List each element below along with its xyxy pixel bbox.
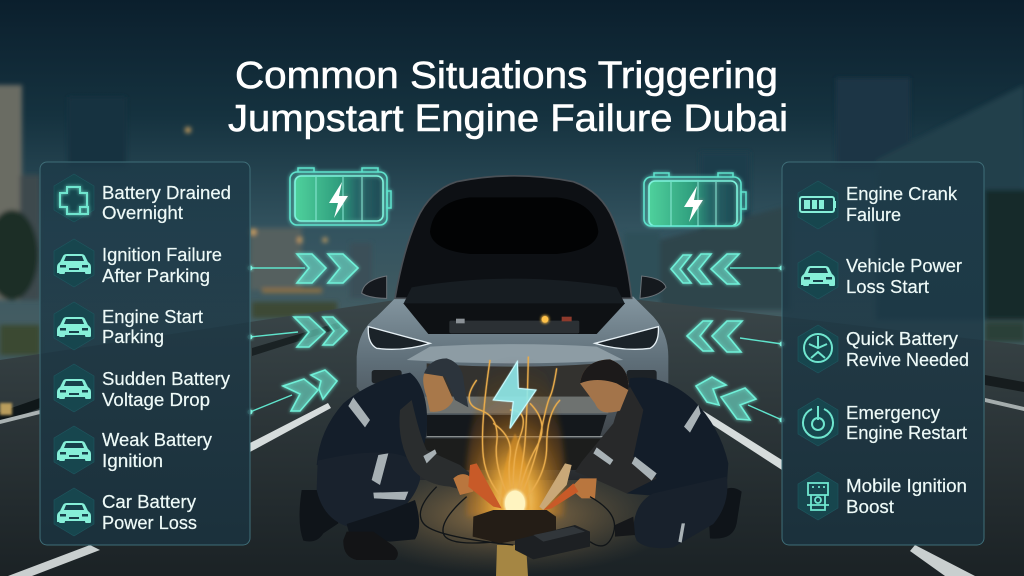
item: Vehicle Power Loss Start: Vehicle Power bbox=[846, 256, 962, 276]
item: Quick Battery Revive Needed: Quick Battery bbox=[846, 329, 958, 349]
item: Ignition Failure After Parking: Ignition Failure bbox=[102, 245, 222, 265]
jumper clamp bbox=[468, 463, 502, 508]
item: Engine Crank Failure: Engine Crank bbox=[846, 184, 958, 204]
arm bbox=[575, 387, 657, 493]
item: Car Battery Power Loss: Car Battery bbox=[102, 492, 196, 512]
item: Battery Drained Overnight: Overnight bbox=[102, 203, 183, 223]
battery icon: left bbox=[290, 168, 391, 225]
torso bbox=[617, 378, 728, 496]
item: Weak Battery Ignition: Weak Battery bbox=[102, 430, 212, 450]
item: Car Battery Power Loss: Power Loss bbox=[102, 513, 197, 533]
hands bbox=[453, 474, 473, 495]
item: Quick Battery Revive Needed: Revive Needed bbox=[846, 350, 969, 370]
item: Battery Drained Overnight bbox=[54, 174, 231, 223]
reflective stripes bbox=[348, 397, 437, 500]
arrow row 3 bbox=[696, 377, 784, 422]
item: Sudden Battery Voltage Drop: Voltage Drop bbox=[102, 390, 210, 410]
open hood bbox=[395, 176, 632, 298]
thigh and knee bbox=[633, 477, 727, 548]
arm bbox=[399, 400, 470, 491]
head and cap bbox=[423, 367, 453, 412]
item: Mobile Ignition Boost bbox=[798, 472, 967, 520]
item: Vehicle Power Loss Start: Loss Start bbox=[846, 277, 929, 297]
car body bbox=[357, 297, 668, 480]
item: Emergency Engine Restart: Engine Restart bbox=[846, 423, 967, 443]
title line 2: Jumpstart Engine Failure Dubai bbox=[228, 98, 788, 140]
grille bbox=[372, 344, 657, 470]
item: Emergency Engine Restart bbox=[798, 398, 967, 446]
arrow row 1 bbox=[248, 254, 358, 283]
engine bay battery bbox=[449, 316, 579, 333]
item: Ignition Failure After Parking bbox=[54, 239, 222, 287]
left mirror bbox=[362, 276, 387, 298]
panel: left situations list bbox=[40, 162, 250, 545]
hood inner window bbox=[430, 197, 598, 254]
right mirror bbox=[640, 276, 666, 298]
reflective stripes bbox=[593, 405, 701, 543]
torso bbox=[317, 373, 427, 472]
item: Engine Crank Failure: Failure bbox=[846, 205, 901, 225]
front boot bbox=[343, 532, 398, 560]
lightning bolt bbox=[493, 362, 536, 428]
jumper clamp bbox=[539, 463, 572, 510]
mechanic: right bbox=[539, 359, 742, 548]
arrow row 2 bbox=[248, 317, 347, 347]
arrow row 2 bbox=[687, 321, 784, 352]
back boot bbox=[300, 490, 338, 541]
item: Sudden Battery Voltage Drop: Sudden Battery bbox=[102, 369, 230, 389]
front foot bbox=[615, 517, 635, 537]
item: Emergency Engine Restart: Emergency bbox=[846, 403, 940, 423]
left headlight bbox=[368, 327, 430, 349]
item: Car Battery Power Loss bbox=[54, 488, 197, 536]
item: Engine Start Parking: Engine Start bbox=[102, 307, 203, 327]
thigh bbox=[317, 453, 420, 527]
head bbox=[580, 359, 628, 413]
flame and lightning spark bbox=[466, 350, 565, 517]
item: Engine Start Parking: Parking bbox=[102, 327, 164, 347]
item: Quick Battery Revive Needed bbox=[798, 325, 969, 373]
arrow row 3 bbox=[248, 370, 337, 414]
item: Weak Battery Ignition bbox=[54, 426, 212, 474]
item: Battery Drained Overnight: Battery Drained bbox=[102, 183, 231, 203]
arrows: right side bbox=[671, 254, 784, 422]
right headlight bbox=[595, 327, 658, 349]
item: Mobile Ignition Boost: Boost bbox=[846, 497, 894, 517]
title bbox=[228, 55, 788, 140]
engine bay bbox=[403, 303, 625, 334]
car with open hood bbox=[357, 176, 668, 480]
battery icon: right bbox=[644, 173, 746, 226]
shin bbox=[347, 500, 419, 542]
item: Mobile Ignition Boost: Mobile Ignition bbox=[846, 476, 967, 496]
item: Vehicle Power Loss Start bbox=[798, 251, 962, 299]
item: Engine Start Parking bbox=[54, 302, 203, 350]
item: Ignition Failure After Parking: After Parking bbox=[102, 266, 210, 286]
panel: right situations list bbox=[782, 162, 984, 545]
item: Weak Battery Ignition: Ignition bbox=[102, 451, 163, 471]
hands bbox=[570, 478, 597, 498]
item: Sudden Battery Voltage Drop bbox=[54, 364, 230, 412]
arrows: left side bbox=[248, 254, 358, 414]
jump starter boxes and cables bbox=[420, 487, 615, 559]
mechanic: left bbox=[300, 358, 502, 560]
back boot bbox=[708, 488, 742, 539]
title line 1: Common Situations Triggering bbox=[235, 55, 778, 97]
item: Engine Crank Failure bbox=[798, 181, 958, 229]
arrow row 1 bbox=[671, 254, 784, 284]
